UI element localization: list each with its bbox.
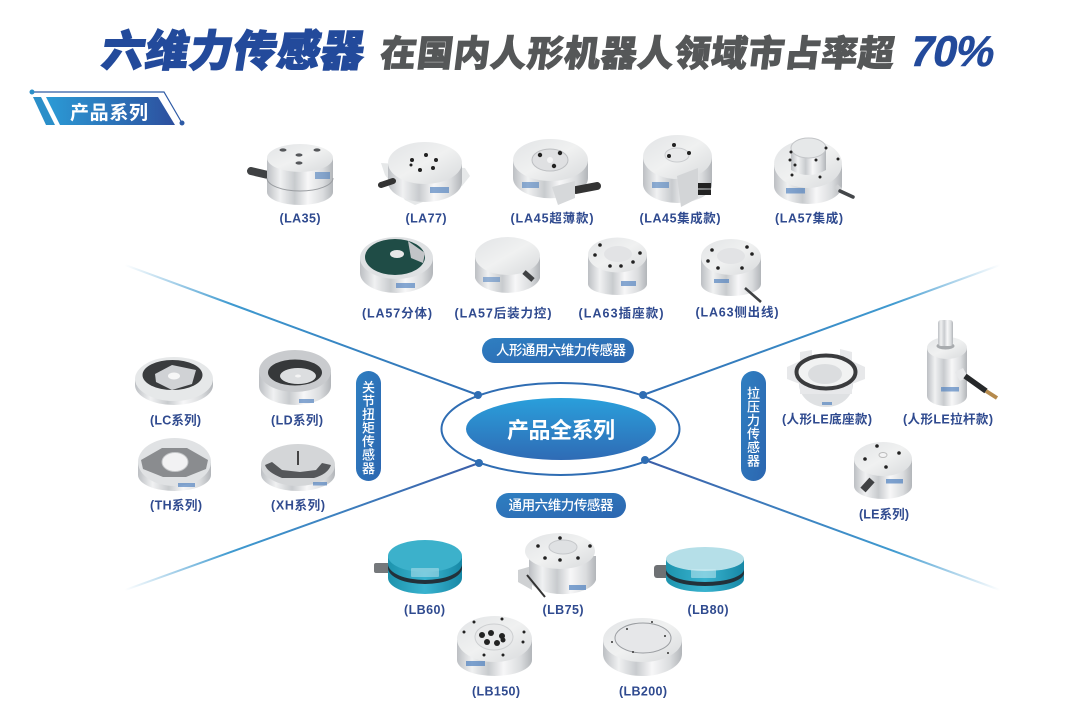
icon: humanoid LE rod sensor <box>927 320 997 406</box>
category pill: joint torque: 感 <box>362 448 375 462</box>
label: (LA57后装力控) <box>454 306 552 320</box>
product: LB80 <box>654 547 744 617</box>
icon: XH sensor <box>261 444 335 491</box>
category pill: tension compression: 拉 <box>747 386 760 401</box>
section badge: product series: 产品系列 <box>70 102 148 124</box>
product: XH series <box>261 444 335 512</box>
label: (人形LE拉杆款) <box>903 412 993 426</box>
icon: LA57 integrated sensor <box>774 138 853 204</box>
product: LB200 <box>603 618 682 698</box>
icon: LB80 sensor <box>654 547 744 592</box>
product: LA63 socket <box>578 238 664 320</box>
icon: LA63 side cable sensor <box>701 239 761 302</box>
product: humanoid LE rod <box>903 320 997 426</box>
label: (LB80) <box>688 603 728 617</box>
icon: LB75 sensor <box>518 533 596 597</box>
icon: LA77 sensor <box>381 142 470 205</box>
label: (LA45集成款) <box>640 210 720 226</box>
icon: LA57 split sensor <box>360 237 433 293</box>
icon: TH sensor <box>138 438 211 491</box>
category pill: joint torque: 节 <box>362 394 375 408</box>
label: (LB150) <box>472 684 520 698</box>
product: LA35 <box>251 144 333 226</box>
category pill: tension compression: 力 <box>747 413 760 428</box>
product: LA45 integrated <box>640 135 720 226</box>
category pill: joint torque: 关 <box>362 380 375 395</box>
label: (LB75) <box>542 603 584 617</box>
category pill: general six-axis <box>496 493 626 518</box>
section badge: product series <box>30 90 184 126</box>
product: LA77 <box>381 142 470 226</box>
label: (LE系列) <box>859 506 909 522</box>
icon: LA57 rear mount sensor <box>475 237 540 293</box>
icon: humanoid LE base sensor <box>787 349 865 407</box>
central hub: all products <box>442 383 680 475</box>
product: LB150 <box>457 616 532 698</box>
central hub: all products: 产品全系列 <box>507 418 615 443</box>
category pill: tension compression: 器 <box>747 454 760 468</box>
product: LA57 split <box>360 237 433 320</box>
product: LA57 rear mount <box>454 237 552 320</box>
category pill: tension compression: 传 <box>747 426 760 442</box>
label: (LB200) <box>619 684 667 698</box>
connector lines <box>125 265 1000 590</box>
category pill: humanoid six-axis <box>482 338 634 363</box>
product: LA45 ultra thin <box>510 139 597 226</box>
category pill: joint torque: 器 <box>362 461 375 476</box>
label: (LB60) <box>404 603 445 617</box>
category pill: tension compression: 感 <box>747 440 760 455</box>
product: humanoid LE base <box>782 349 872 426</box>
product: LA57 integrated <box>774 138 853 226</box>
icon: LB150 sensor <box>457 616 532 676</box>
label: (LA63插座款) <box>578 306 664 320</box>
category pill: joint torque: 传 <box>362 434 375 449</box>
product: LA63 side cable <box>696 239 778 320</box>
product: LD series <box>259 350 331 428</box>
product: LB75 <box>518 533 596 617</box>
category pill: joint torque: 矩 <box>362 420 375 436</box>
label: (LA57集成) <box>775 210 843 226</box>
icon: LA45 integrated sensor <box>643 135 712 207</box>
label: (LA63侧出线) <box>696 304 778 320</box>
icon: LA35 sensor <box>251 144 333 205</box>
title: share figure: 70% <box>906 28 1000 76</box>
category pill: general six-axis: 通用六维力传感器 <box>508 497 614 513</box>
label: (LC系列) <box>150 412 201 428</box>
title: market share statement: 在国内人形机器人领域市占率超 <box>378 33 897 74</box>
category pill: humanoid six-axis: 人形通用六维力传感器 <box>496 342 626 358</box>
category pill: joint torque: 扭 <box>362 407 375 422</box>
label: (TH系列) <box>150 498 202 512</box>
product: LE series <box>854 442 912 522</box>
icon: LA63 socket sensor <box>588 238 647 295</box>
label: (人形LE底座款) <box>782 412 872 426</box>
icon: LB200 sensor <box>603 618 682 676</box>
label: (LA57分体) <box>362 306 432 320</box>
product: LC series <box>135 357 213 428</box>
icon: LE sensor <box>854 442 912 499</box>
category pill: joint torque <box>356 371 381 481</box>
category pill: tension compression <box>741 371 766 481</box>
label: (XH系列) <box>271 498 325 512</box>
label: (LA77) <box>406 212 446 226</box>
icon: LD sensor <box>259 350 331 405</box>
product: LB60 <box>374 540 462 617</box>
label: (LD系列) <box>271 412 323 428</box>
label: (LA35) <box>280 212 320 226</box>
icon: LB60 sensor <box>374 540 462 594</box>
title: highlighted product name: 六维力传感器 <box>98 28 369 76</box>
icon: LC sensor <box>135 357 213 405</box>
label: (LA45超薄款) <box>510 210 594 226</box>
title <box>98 28 1000 76</box>
product: TH series <box>138 438 211 512</box>
icon: LA45 ultra thin sensor <box>513 139 597 205</box>
category pill: tension compression: 压 <box>747 400 760 414</box>
